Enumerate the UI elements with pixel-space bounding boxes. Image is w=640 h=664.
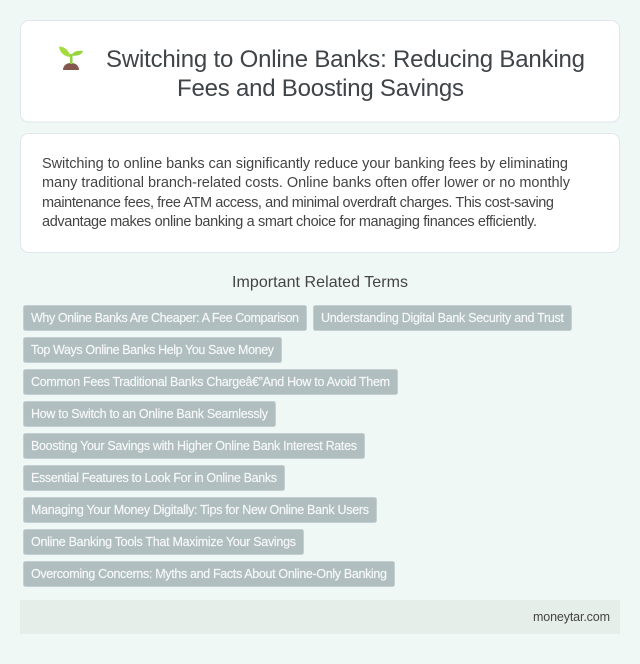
tag [24,402,276,426]
tag: Managing Your Money Digitally: Tips for New Online Bank Users [31,503,369,517]
panel: intro paragraph [20,134,620,252]
text block: intro: advantage makes online banking a smart choice for managing finances efficiently. [42,214,537,230]
text block: intro [42,156,571,230]
heading: related terms: Important Related Terms [232,274,408,291]
text block: intro: maintenance fees, free ATM access, and minimal overdraft charges. This cost-saving [42,195,554,211]
tag [24,370,398,394]
tag [24,562,394,586]
text block: intro: Switching to online banks can significantly reduce your banking fees by eliminating [42,156,568,172]
icon: sprout [59,46,83,70]
tags list [24,306,572,586]
tag: How to Switch to an Online Bank Seamlessly [31,407,269,421]
tag [24,306,306,330]
tag: Essential Features to Look For in Online Banks [31,471,277,485]
panel: title card [20,20,620,122]
tag [24,338,282,362]
text block: intro: many traditional branch-related costs. Online banks often offer lower or no monthly [42,175,571,191]
tag [314,306,572,330]
tag: Why Online Banks Are Cheaper: A Fee Comparison [31,311,299,325]
tag [24,434,364,458]
title [106,46,585,102]
tag: Boosting Your Savings with Higher Online Bank Interest Rates [31,439,357,453]
tag: Top Ways Online Banks Help You Save Money [31,343,275,357]
tag [24,530,304,554]
tag: Online Banking Tools That Maximize Your Savings [31,535,296,549]
tag: Common Fees Traditional Banks Chargeâ€”And How to Avoid Them [31,375,390,389]
tag [24,498,376,522]
tag: Understanding Digital Bank Security and Trust [321,311,565,325]
tag [24,466,284,490]
title: Fees and Boosting Savings [177,75,464,102]
footer: moneytar.com [533,610,610,624]
footer [20,600,620,634]
tag: Overcoming Concerns: Myths and Facts About Online-Only Banking [31,567,387,581]
title: Switching to Online Banks: Reducing Banking [106,46,585,73]
